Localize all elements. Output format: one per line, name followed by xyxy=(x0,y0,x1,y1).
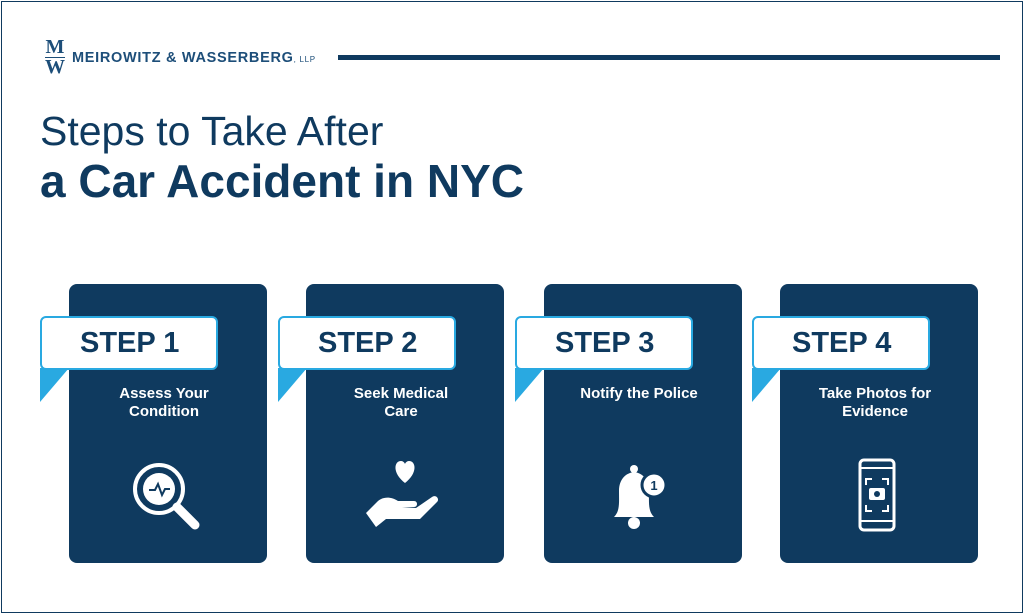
icon: phone camera xyxy=(858,458,896,532)
card 4: Evidence xyxy=(842,403,908,420)
card 3: Notify the Police xyxy=(580,385,698,402)
icon: magnifier xyxy=(133,463,200,530)
logo xyxy=(45,36,316,78)
title: a Car Accident in NYC xyxy=(40,155,524,207)
card 2: Care xyxy=(384,403,418,420)
title xyxy=(40,108,524,207)
text: STEP 2 xyxy=(318,327,417,359)
icon: bell xyxy=(614,465,664,529)
card 1 xyxy=(69,284,267,563)
logo name: MEIROWITZ & WASSERBERG, LLP xyxy=(72,50,316,66)
step 4 label xyxy=(752,368,781,402)
step 1 label xyxy=(40,368,69,402)
card 1: Assess Your xyxy=(119,385,209,402)
logo mark: M W xyxy=(45,36,65,78)
card 3 xyxy=(544,284,742,563)
card 2 xyxy=(306,284,504,563)
header line xyxy=(338,55,1000,60)
card 4: Take Photos for xyxy=(819,385,931,402)
text: STEP 3 xyxy=(555,327,654,359)
step 2 label xyxy=(278,368,307,402)
step 3 label xyxy=(515,368,544,402)
card 2: Seek Medical xyxy=(354,385,448,402)
title: Steps to Take After xyxy=(40,108,383,154)
card 1: Condition xyxy=(129,403,199,420)
icon: hand heart xyxy=(366,461,438,527)
text: STEP 1 xyxy=(80,327,179,359)
card 4 xyxy=(780,284,978,563)
icon: bell: 1 xyxy=(650,478,658,493)
text: STEP 4 xyxy=(792,327,891,359)
